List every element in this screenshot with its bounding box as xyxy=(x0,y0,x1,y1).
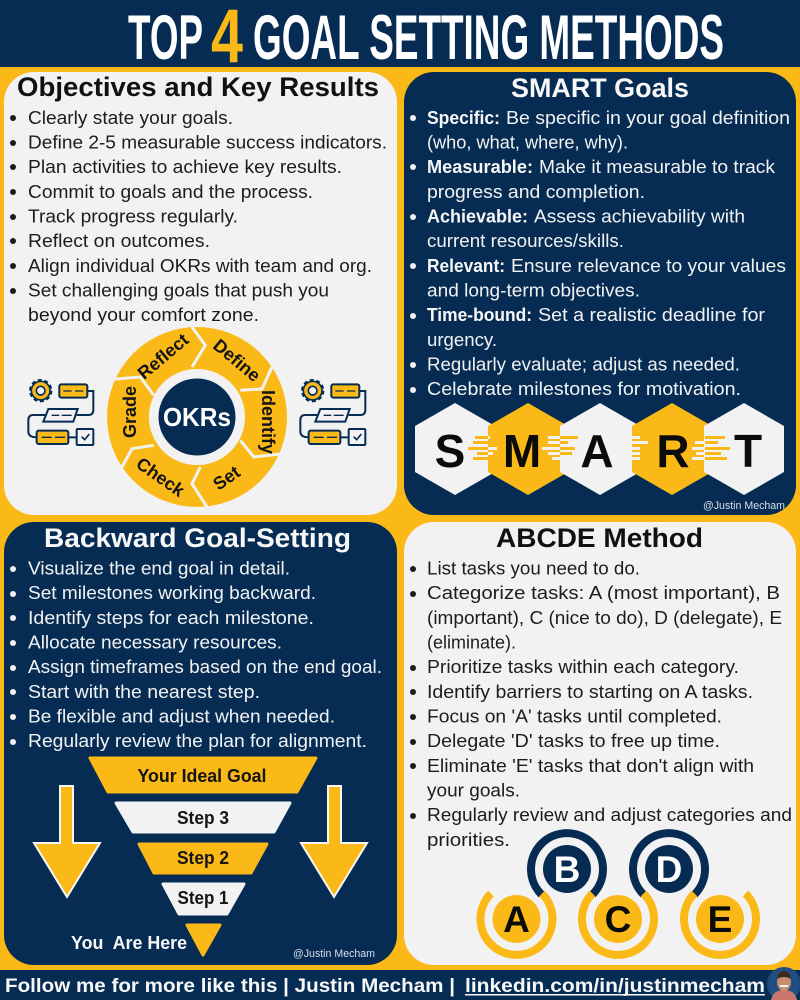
footer bar xyxy=(0,967,800,1000)
heading: SMART Goals: SMART Goals xyxy=(511,73,689,103)
text block: ABCDE bullet list: Eliminate 'E' tasks that don't align with xyxy=(427,755,754,776)
text block: ABCDE bullet list: Regularly review and adjust categories and xyxy=(427,804,792,825)
text block: SMART bullet list: Celebrate milestones for motivation. xyxy=(427,378,741,399)
funnel: Step 1 xyxy=(163,884,244,914)
text block: ABCDE bullet list: your goals. xyxy=(427,780,520,800)
text block: OKR bullet list: Set challenging goals that push you xyxy=(28,280,329,300)
text block: OKR bullet list: Plan activities to achieve key results. xyxy=(28,156,342,177)
text block: ABCDE bullet list: Delegate 'D' tasks to free up time. xyxy=(427,730,720,751)
text block: Backward bullet list: Identify steps for each milestone. xyxy=(28,607,314,628)
text block: OKR bullet list: beyond your comfort zone. xyxy=(28,304,259,325)
heading: ABCDE Method: ABCDE Method xyxy=(496,523,703,553)
text block: Backward bullet list: Assign timeframes based on the end goal. xyxy=(28,656,382,677)
text block: OKR bullet list: Align individual OKRs with team and org. xyxy=(28,255,372,276)
arrow: right down xyxy=(301,786,367,897)
text block: ABCDE bullet list: Focus on 'A' tasks until completed. xyxy=(427,706,722,726)
wheel stage labels xyxy=(120,329,278,501)
chart: OKR cycle wheel xyxy=(115,327,280,507)
badge: A: A xyxy=(503,899,530,940)
avatar xyxy=(767,967,800,1000)
funnel: Your Ideal Goal xyxy=(90,758,316,792)
text block: SMART bullet list xyxy=(410,107,790,399)
badge: B: B xyxy=(554,849,580,890)
funnel: You Are Here: You Are Here xyxy=(71,933,187,953)
graphic: ABCDE rings xyxy=(480,833,756,955)
badge: D: D xyxy=(656,849,682,890)
wheel stage labels: Set xyxy=(209,462,244,494)
text block: SMART bullet list: Achievable: xyxy=(427,206,528,226)
funnel: Your Ideal Goal: Your Ideal Goal xyxy=(138,766,266,786)
graphic: SMART hexagons: A xyxy=(580,425,614,477)
panel: Backward Goal-Setting xyxy=(4,522,397,965)
panel: ABCDE Method xyxy=(404,522,796,965)
badge: C: C xyxy=(605,899,631,940)
text block: Backward bullet list: Start with the nearest step. xyxy=(28,681,260,702)
text block: ABCDE bullet list: Categorize tasks: A (most important), B xyxy=(427,582,780,603)
wheel stage labels: Grade xyxy=(120,386,140,438)
text block: SMART bullet list: Be specific in your goal definition xyxy=(506,107,790,128)
funnel: You Are Here xyxy=(71,925,220,955)
graphic: SMART hexagons: T xyxy=(734,425,762,477)
title banner: TOP xyxy=(128,3,203,73)
text block: Backward bullet list: Visualize the end goal in detail. xyxy=(28,558,290,578)
badge: E xyxy=(684,894,756,955)
text block: OKR bullet list: Commit to goals and the process. xyxy=(28,181,313,202)
text block: OKR bullet list xyxy=(10,107,387,325)
heading: Objectives and Key Results: Objectives and Key Results xyxy=(17,72,379,102)
icon: process flow right xyxy=(300,381,365,445)
title banner xyxy=(0,0,800,79)
text block: SMART bullet list: Specific: xyxy=(427,107,500,128)
funnel: Step 3: Step 3 xyxy=(177,808,229,828)
text block: ABCDE bullet list: Identify barriers to starting on A tasks. xyxy=(427,681,753,702)
text block: Backward bullet list: Regularly review the plan for alignment. xyxy=(28,730,367,751)
wheel stage labels: Reflect xyxy=(134,329,193,383)
text block: SMART bullet list: current resources/skills. xyxy=(427,230,624,251)
text block: SMART bullet list: and long-term objectives. xyxy=(427,280,640,300)
label: OKRs: OKRs xyxy=(163,402,231,432)
text block: SMART bullet list: Regularly evaluate; adjust as needed. xyxy=(427,354,740,374)
text block: SMART bullet list: Make it measurable to track xyxy=(539,156,776,177)
wheel stage labels: Check xyxy=(133,453,189,501)
wheel stage labels: Define xyxy=(209,335,264,386)
text block: Backward bullet list: Allocate necessary resources. xyxy=(28,632,282,652)
footer text: Follow me for more like this | Justin Mecham | xyxy=(5,975,455,997)
text block: OKR bullet list: Define 2-5 measurable success indicators. xyxy=(28,132,387,152)
panel: SMART Goals xyxy=(404,72,796,515)
graphic: SMART hexagons: S xyxy=(435,425,465,477)
text block: ABCDE bullet list xyxy=(410,558,792,850)
text block: ABCDE bullet list: priorities. xyxy=(427,829,510,850)
text block: SMART bullet list: Measurable: xyxy=(427,156,533,177)
panel: Objectives and Key Results xyxy=(4,72,397,515)
heading: Backward Goal-Setting: Backward Goal-Setting xyxy=(44,523,351,553)
badge: A xyxy=(480,894,552,955)
text block: SMART bullet list: Time-bound: xyxy=(427,304,532,325)
badge: D xyxy=(633,833,705,894)
funnel: Step 1: Step 1 xyxy=(178,888,228,908)
text block: SMART bullet list: urgency. xyxy=(427,329,497,350)
credit: Backward panel: @Justin Mecham xyxy=(293,948,375,960)
text block: OKR bullet list: Reflect on outcomes. xyxy=(28,230,210,251)
icon: process flow left xyxy=(28,381,93,445)
text block: ABCDE bullet list: (eliminate). xyxy=(427,632,516,652)
text block: OKR bullet list: Track progress regularly. xyxy=(28,206,238,226)
text block: SMART bullet list: Set a realistic deadline for xyxy=(538,304,765,325)
badge: B xyxy=(531,833,603,894)
graphic: SMART hexagons xyxy=(415,403,784,495)
graphic: SMART hexagons: M xyxy=(503,425,541,477)
text block: ABCDE bullet list: List tasks you need to do. xyxy=(427,558,640,578)
graphic: SMART hexagons: R xyxy=(656,425,690,477)
text block: Backward bullet list: Be flexible and adjust when needed. xyxy=(28,706,335,726)
text block: SMART bullet list: Ensure relevance to your values xyxy=(511,255,786,276)
wheel stage labels: Identify xyxy=(258,390,278,454)
funnel: Step 2: Step 2 xyxy=(177,848,229,868)
badge: C xyxy=(582,894,654,955)
text block: Backward bullet list xyxy=(10,558,382,751)
footer link: linkedin.com/in/justinmecham xyxy=(465,975,765,997)
arrow: left down xyxy=(34,786,100,897)
text block: SMART bullet list: Assess achievability with xyxy=(534,206,745,226)
badge: E: E xyxy=(708,899,732,940)
funnel: Step 3 xyxy=(116,803,290,832)
text block: Backward bullet list: Set milestones working backward. xyxy=(28,582,316,603)
chart: goal funnel xyxy=(71,758,316,955)
text block: SMART bullet list: Relevant: xyxy=(427,255,505,276)
text block: SMART bullet list: progress and completion. xyxy=(427,181,645,202)
text block: SMART bullet list: (who, what, where, why). xyxy=(427,132,628,152)
text block: OKR bullet list: Clearly state your goals. xyxy=(28,107,233,128)
text block: ABCDE bullet list: (important), C (nice to do), D (delegate), E xyxy=(427,607,782,628)
text block: ABCDE bullet list: Prioritize tasks within each category. xyxy=(427,656,739,677)
credit: SMART panel: @Justin Mecham xyxy=(703,500,785,512)
funnel: Step 2 xyxy=(139,844,267,873)
